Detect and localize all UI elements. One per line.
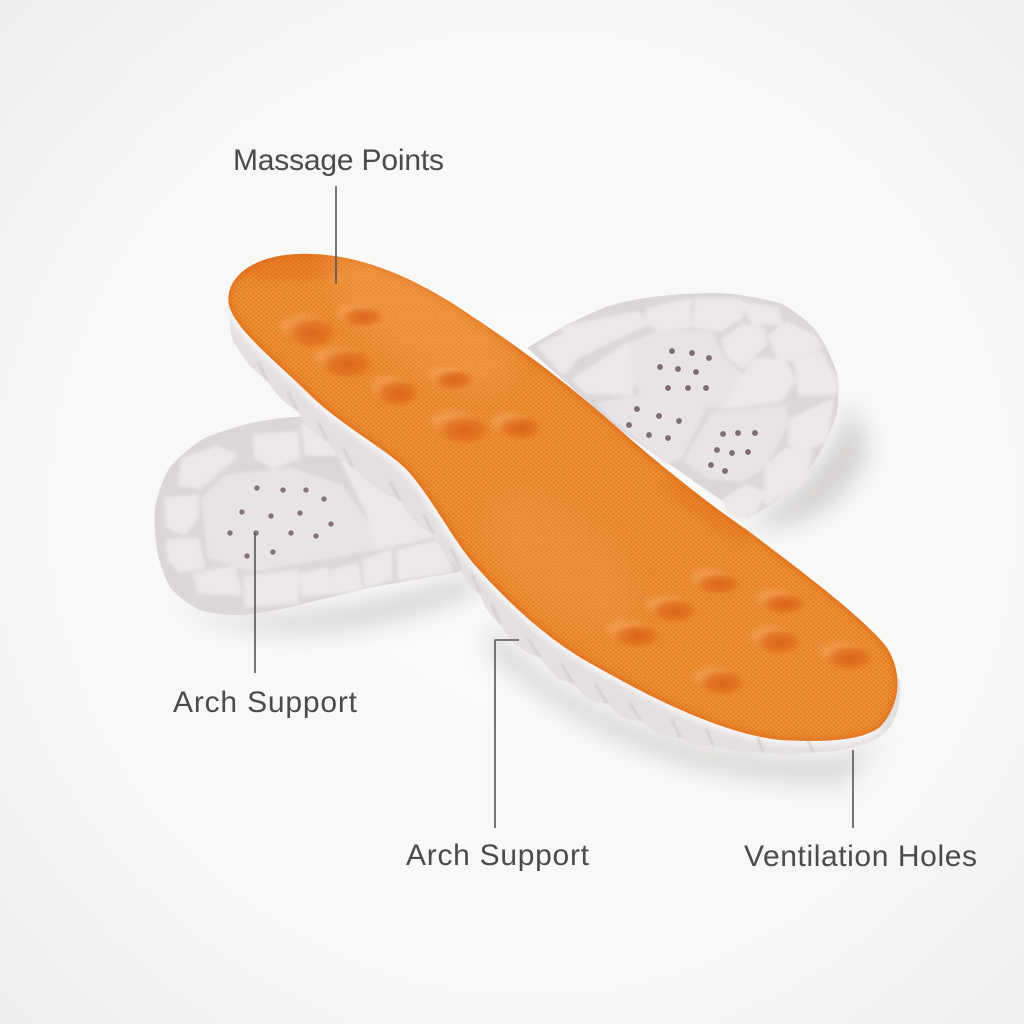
right sole outline	[527, 293, 838, 518]
insole: left rear sole	[154, 417, 470, 615]
left sole outline	[154, 417, 470, 615]
left sole cells	[167, 425, 450, 605]
orange shading	[228, 220, 898, 741]
cast shadows	[175, 400, 880, 780]
bump halos	[280, 305, 859, 685]
right sole cells	[540, 301, 835, 517]
leader line: massage points	[335, 186, 337, 284]
orange mesh surface	[228, 254, 898, 741]
leader line: arch support center	[495, 640, 519, 828]
ventilation holes: left sole	[227, 485, 334, 559]
leader line: ventilation holes	[852, 750, 854, 828]
label: arch support left: Arch Support	[173, 686, 358, 719]
callout: arch support center	[406, 640, 590, 872]
insole: orange top layer	[228, 220, 898, 741]
label: ventilation holes: Ventilation Holes	[744, 840, 977, 873]
leader line: arch support left	[254, 533, 256, 673]
insole: white foam base	[228, 300, 900, 754]
foam ridges	[258, 362, 813, 752]
bump cores	[285, 306, 876, 697]
foam top highlight	[229, 305, 880, 741]
label: arch support center: Arch Support	[406, 839, 590, 872]
label: massage points: Massage Points	[233, 144, 444, 177]
ventilation holes: right sole	[626, 348, 758, 474]
massage points: forefoot and heel bumps	[280, 305, 876, 697]
insole: right rear sole	[527, 293, 838, 518]
